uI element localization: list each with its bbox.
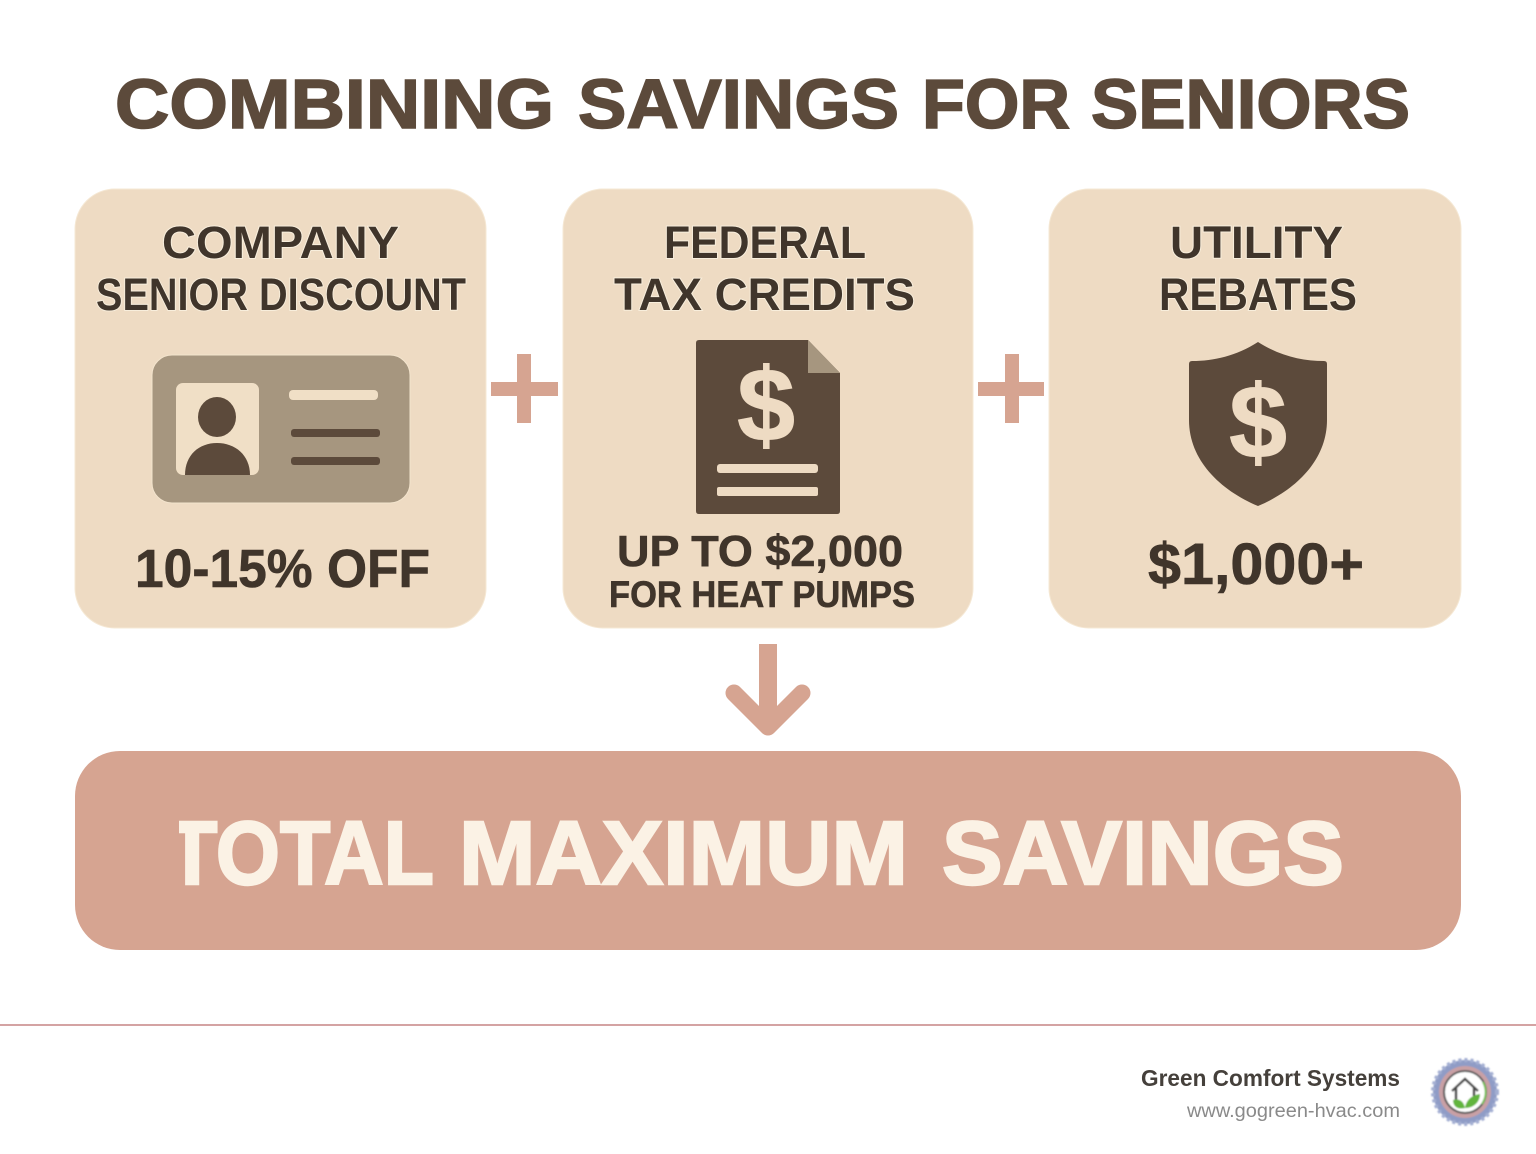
credit amount: UP TO $2,000 xyxy=(617,527,903,576)
rebate amount: $1,000+ xyxy=(1148,532,1364,597)
panel: federal tax credits xyxy=(563,189,973,628)
heading: company senior discount: SENIOR DISCOUNT xyxy=(96,269,466,320)
plus sign 1 xyxy=(491,354,558,423)
credit amount xyxy=(609,527,915,615)
plus sign 2 xyxy=(978,354,1044,423)
heading: federal tax credits: FEDERAL xyxy=(664,217,866,268)
footer website: www.gogreen-hvac.com xyxy=(1186,1101,1400,1122)
heading: company senior discount xyxy=(96,217,466,320)
footer company name: Green Comfort Systems xyxy=(1141,1065,1400,1091)
arrow: down to total xyxy=(734,644,802,727)
icon: senior ID card xyxy=(152,355,410,503)
discount amount: 10-15% OFF xyxy=(135,539,430,599)
icon: shield with dollar: $ xyxy=(1229,365,1287,481)
heading: federal tax credits xyxy=(614,217,915,320)
credit amount: FOR HEAT PUMPS xyxy=(609,574,915,615)
panel: company senior discount xyxy=(75,189,486,628)
heading: utility rebates: REBATES xyxy=(1159,269,1357,320)
heading: federal tax credits: TAX CREDITS xyxy=(614,269,915,320)
title: COMBINING xyxy=(115,65,554,143)
heading: utility rebates xyxy=(1159,217,1357,320)
total label: TOTAL xyxy=(167,804,434,904)
icon: tax document with dollar: $ xyxy=(737,348,795,464)
panel: utility rebates xyxy=(1049,189,1461,628)
title xyxy=(115,65,1410,143)
title: SAVINGS xyxy=(578,65,899,143)
total label: MAXIMUM xyxy=(459,804,908,904)
heading: utility rebates: UTILITY xyxy=(1170,217,1343,268)
icon: shield with dollar xyxy=(1189,342,1327,506)
total label xyxy=(179,820,1342,886)
title: FOR xyxy=(922,65,1070,143)
icon: company logo xyxy=(1433,1060,1497,1124)
icon: tax document with dollar xyxy=(696,340,840,514)
total label: SAVINGS xyxy=(942,804,1344,904)
title: SENIORS xyxy=(1091,65,1410,143)
panel: total maximum savings xyxy=(75,751,1461,950)
heading: company senior discount: COMPANY xyxy=(162,217,399,268)
